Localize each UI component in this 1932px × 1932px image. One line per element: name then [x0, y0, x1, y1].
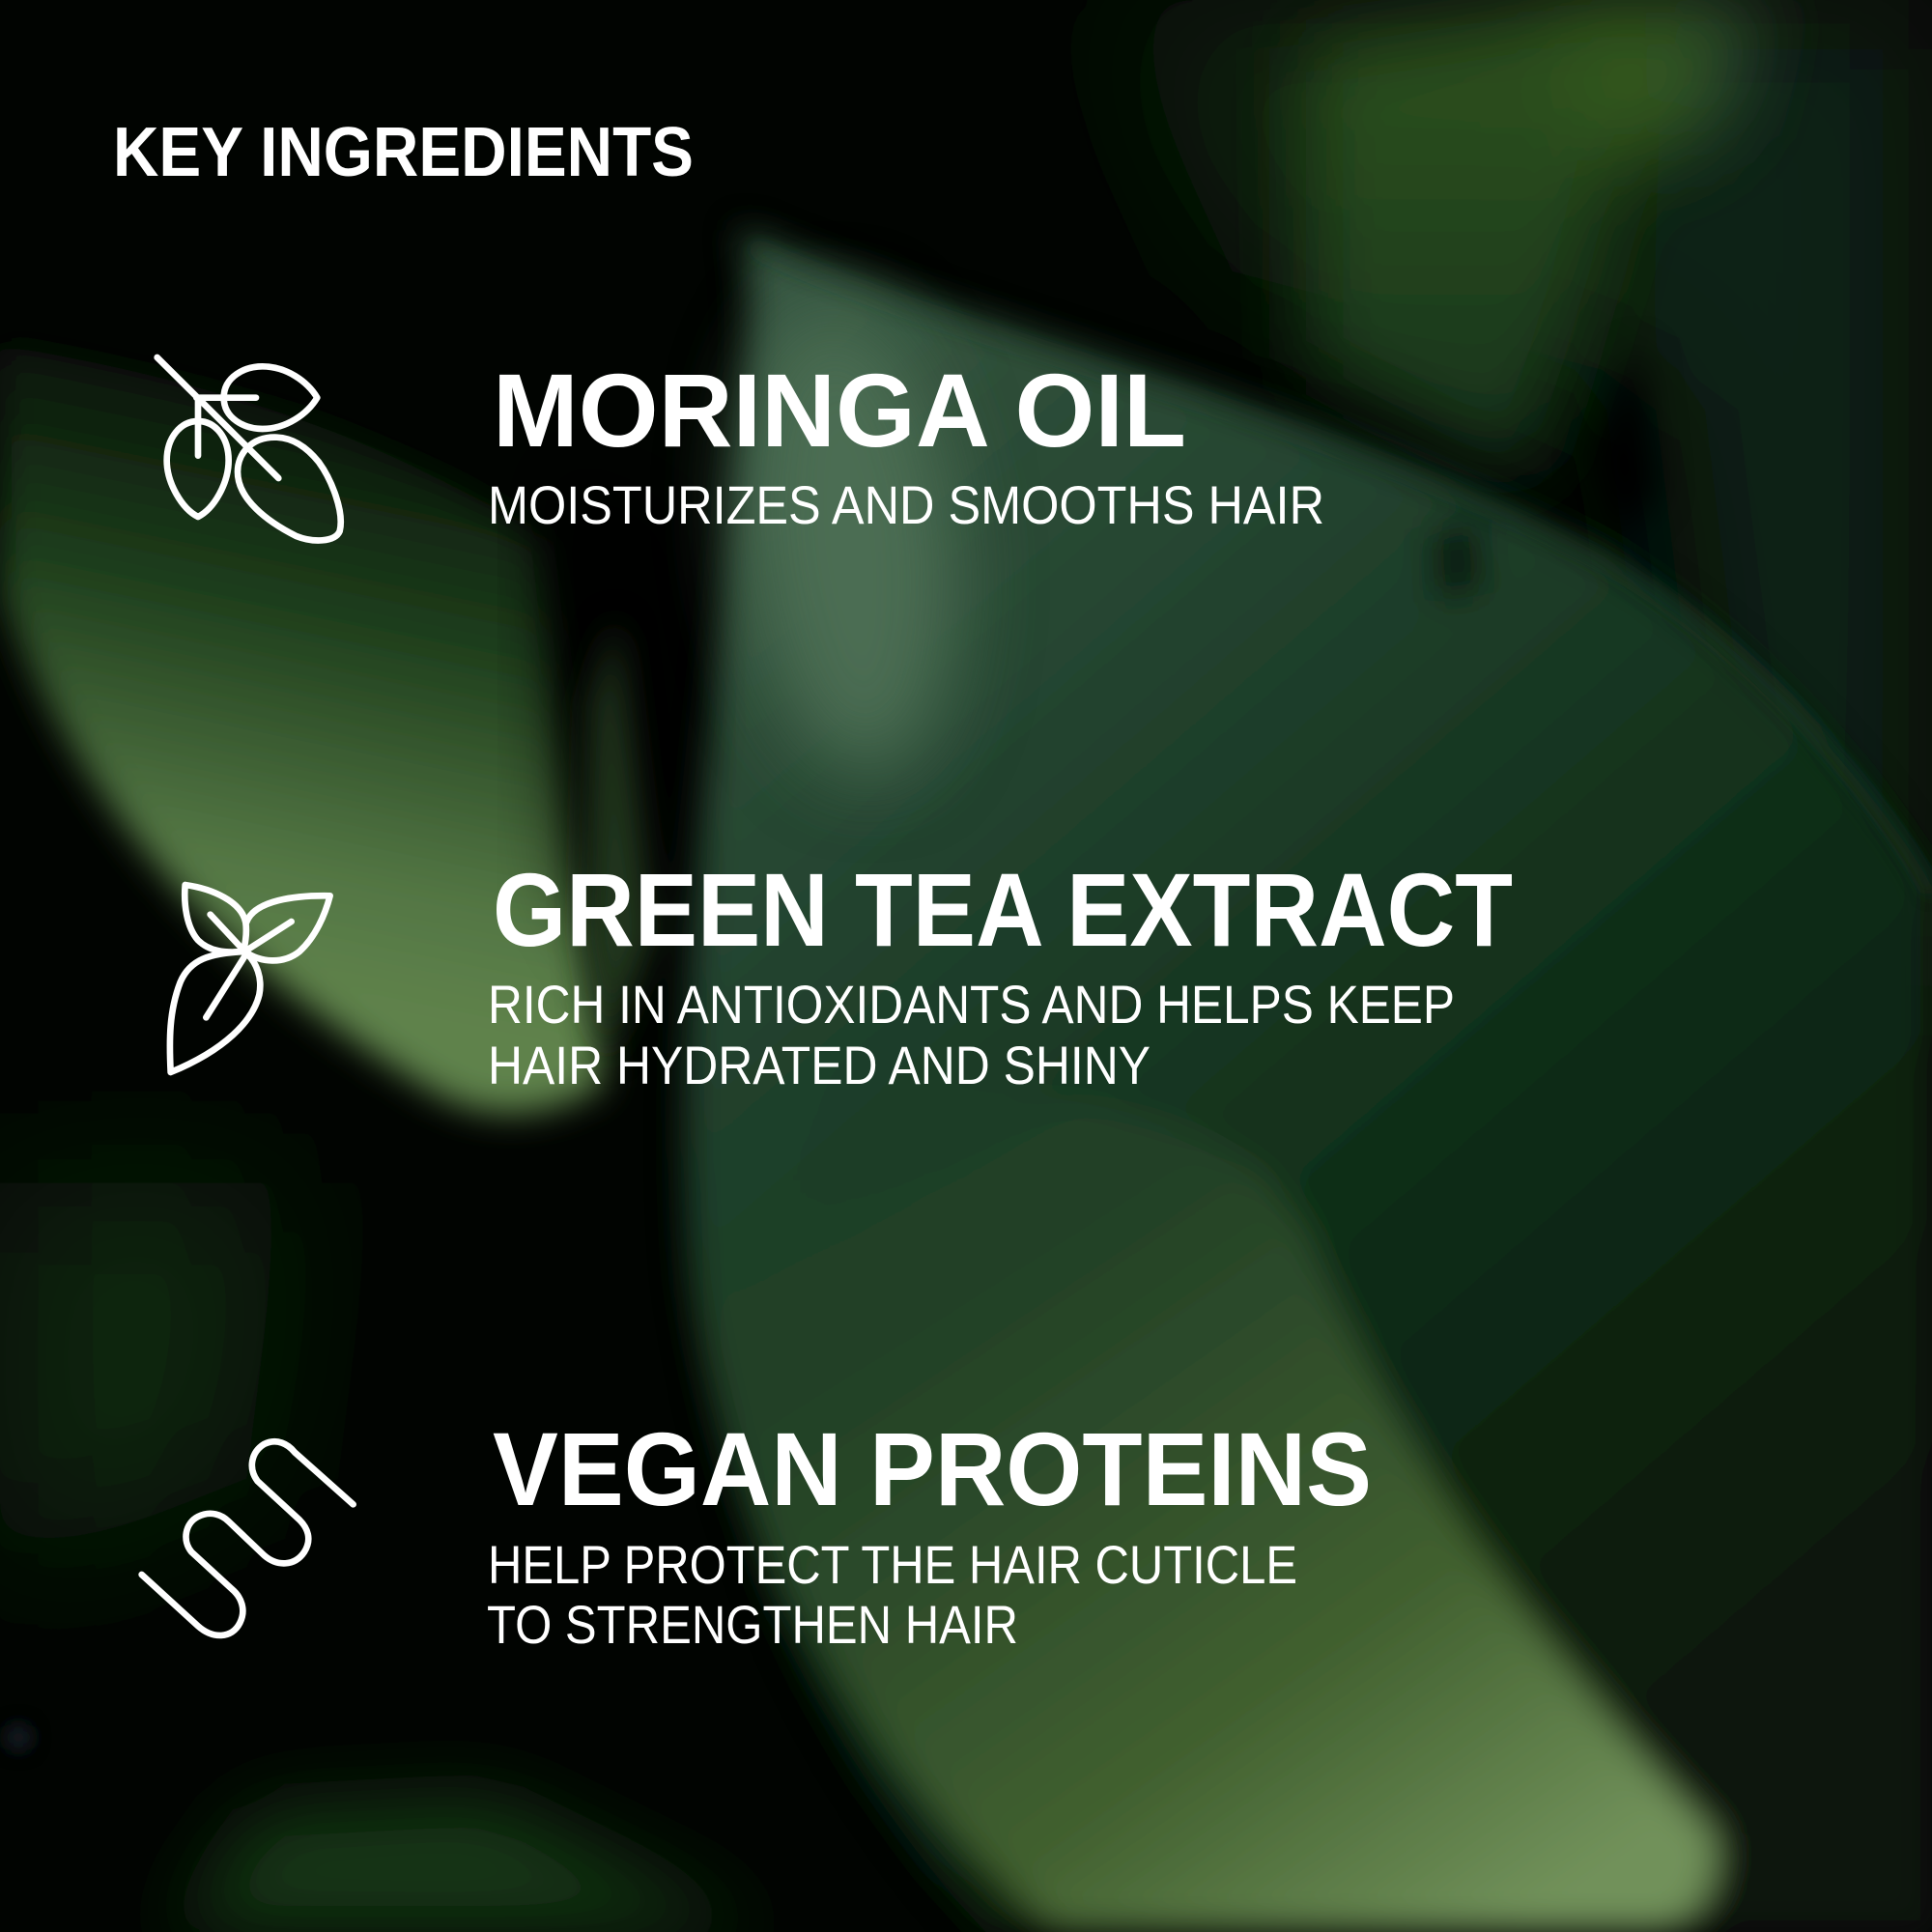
description: green tea extract: HAIR HYDRATED AND SHINY: [488, 1035, 1151, 1095]
description: green tea extract: RICH IN ANTIOXIDANTS AND HELPS KEEP: [488, 974, 1455, 1035]
icon: moringa leaves: [157, 357, 341, 540]
heading: vegan proteins: VEGAN PROTEINS: [493, 1410, 1372, 1527]
icon: vegan protein chain: [142, 1441, 354, 1635]
title: KEY INGREDIENTS: [113, 114, 694, 191]
heading: green tea extract: GREEN TEA EXTRACT: [493, 851, 1513, 968]
description: vegan proteins: TO STRENGTHEN HAIR: [487, 1594, 1018, 1655]
heading: moringa oil: MORINGA OIL: [493, 352, 1186, 469]
description: moringa oil: MOISTURIZES AND SMOOTHS HAIR: [488, 474, 1324, 535]
description: vegan proteins: HELP PROTECT THE HAIR CUTICLE: [488, 1534, 1297, 1595]
icon: green tea leaves: [170, 885, 330, 1072]
